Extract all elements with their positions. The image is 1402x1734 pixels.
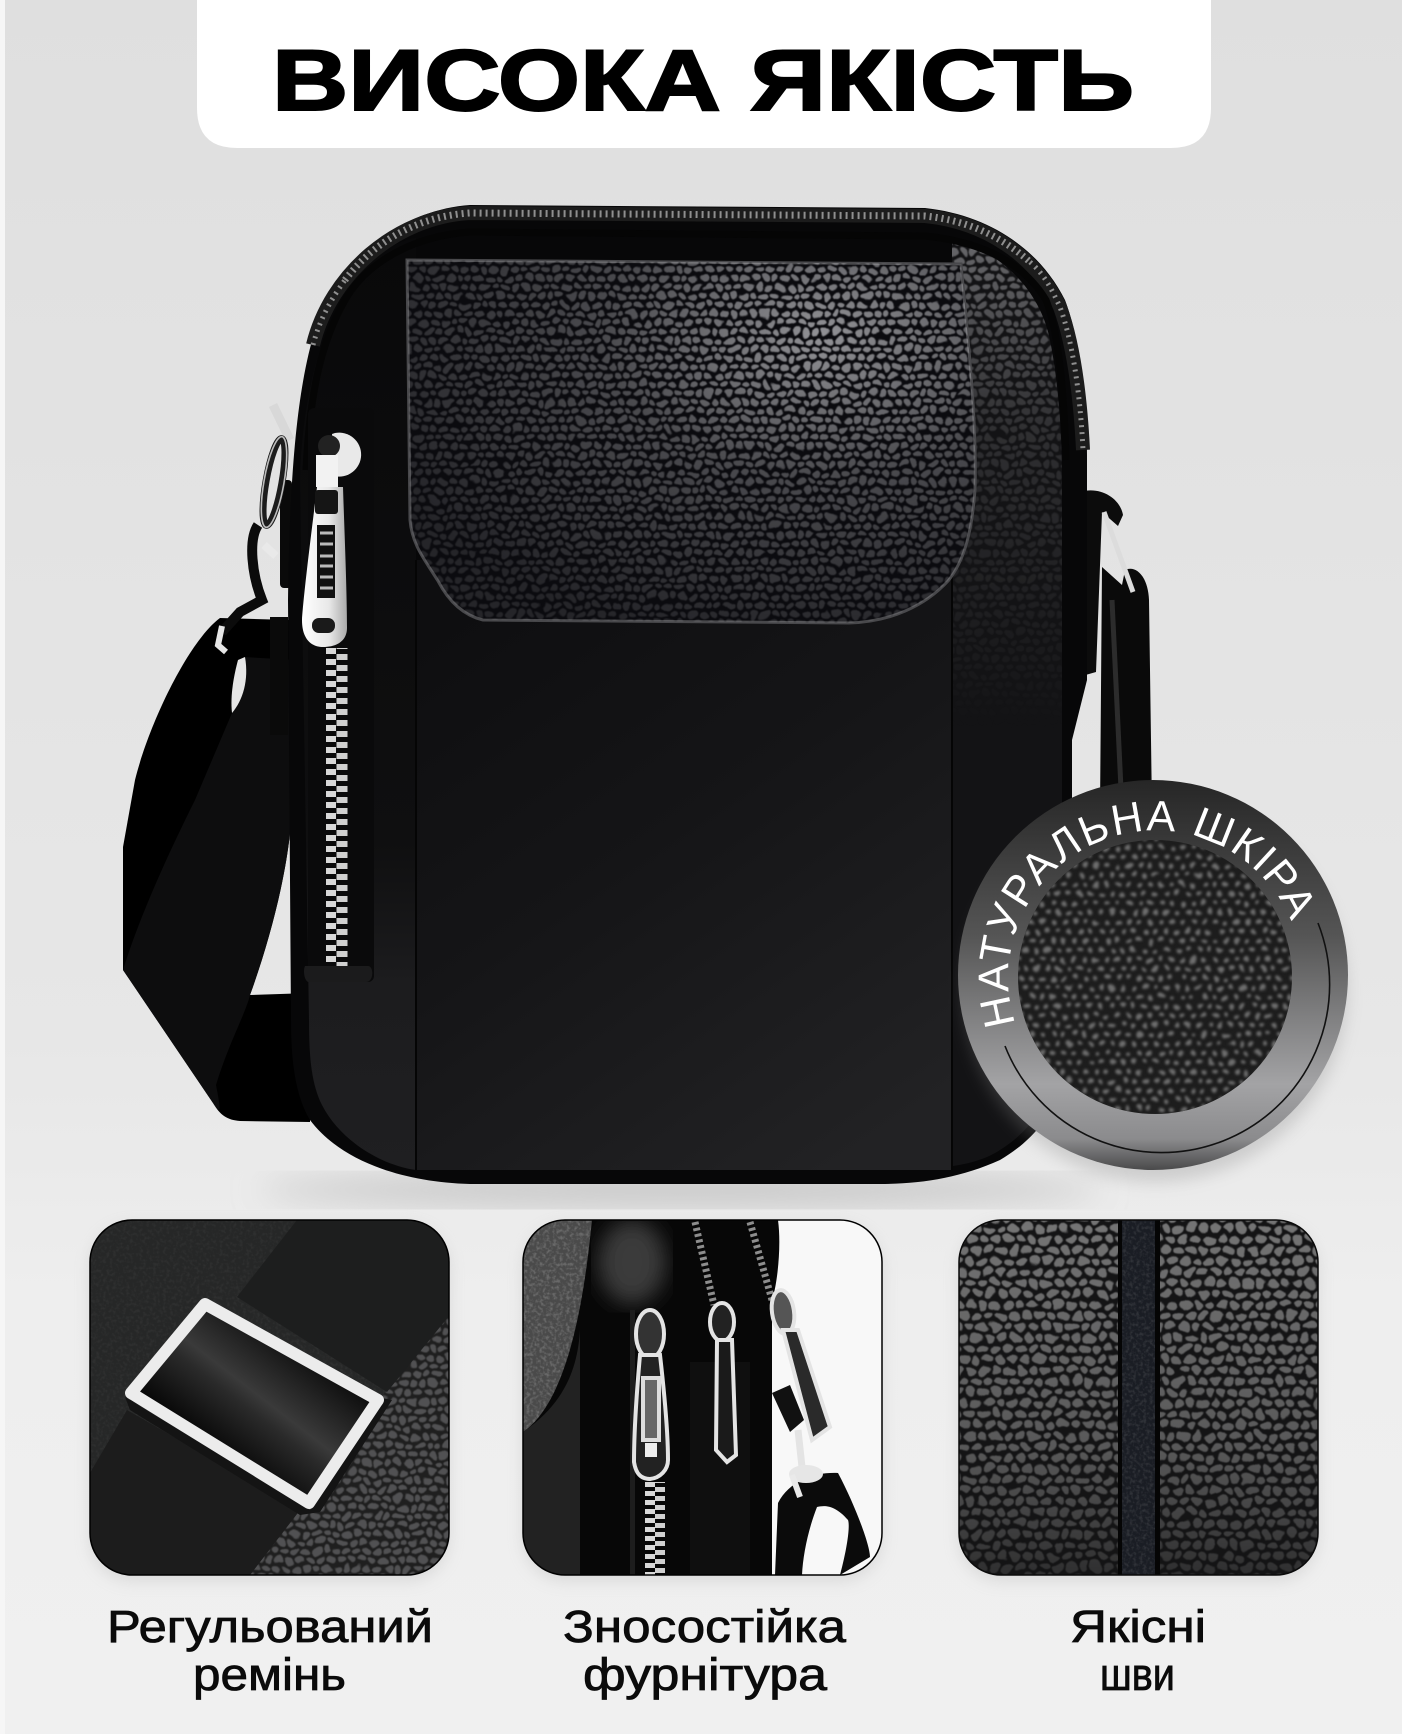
bag side panel left	[300, 238, 416, 1170]
badge curved label: НАТУРАЛЬНА ШКІРА	[978, 801, 1312, 1027]
zipper pulls	[634, 1289, 830, 1479]
strap end	[775, 1473, 870, 1575]
zipper teeth	[650, 1482, 660, 1575]
bag front panel	[416, 560, 952, 1170]
caption: durable hardware	[563, 1601, 847, 1700]
bag body	[288, 205, 1087, 1184]
card: stitching leather	[956, 1219, 1320, 1584]
right strap loop and ring	[1080, 490, 1152, 810]
caption: adjustable strap: ремінь	[193, 1649, 346, 1700]
zip teeth	[331, 648, 342, 966]
badge leather texture	[1018, 840, 1292, 1114]
badge ring	[958, 780, 1348, 1170]
flap	[406, 258, 977, 624]
card: hardware zippers	[523, 1220, 882, 1581]
card: adjustable strap	[90, 1220, 460, 1585]
zip pocket	[304, 408, 374, 982]
title bar	[197, 0, 1211, 148]
buckle	[125, 1303, 392, 1515]
title: ВИСОКА ЯКІСТЬ	[272, 33, 1134, 129]
caption: durable hardware: Зносостійка	[563, 1601, 847, 1652]
badge: natural leather	[958, 780, 1351, 1187]
left clasp hardware	[218, 405, 292, 652]
caption: adjustable strap	[107, 1601, 433, 1700]
caption: quality seams: Якісні	[1070, 1601, 1206, 1652]
zipper pull	[302, 433, 361, 647]
bag side panel right	[945, 240, 1062, 1167]
caption: durable hardware: фурнітура	[583, 1649, 828, 1700]
caption: quality seams: шви	[1100, 1650, 1175, 1700]
zipper band	[313, 213, 1083, 450]
caption: quality seams	[1070, 1601, 1206, 1700]
caption: adjustable strap: Регульований	[107, 1601, 433, 1652]
shoulder strap: left	[123, 480, 310, 1122]
